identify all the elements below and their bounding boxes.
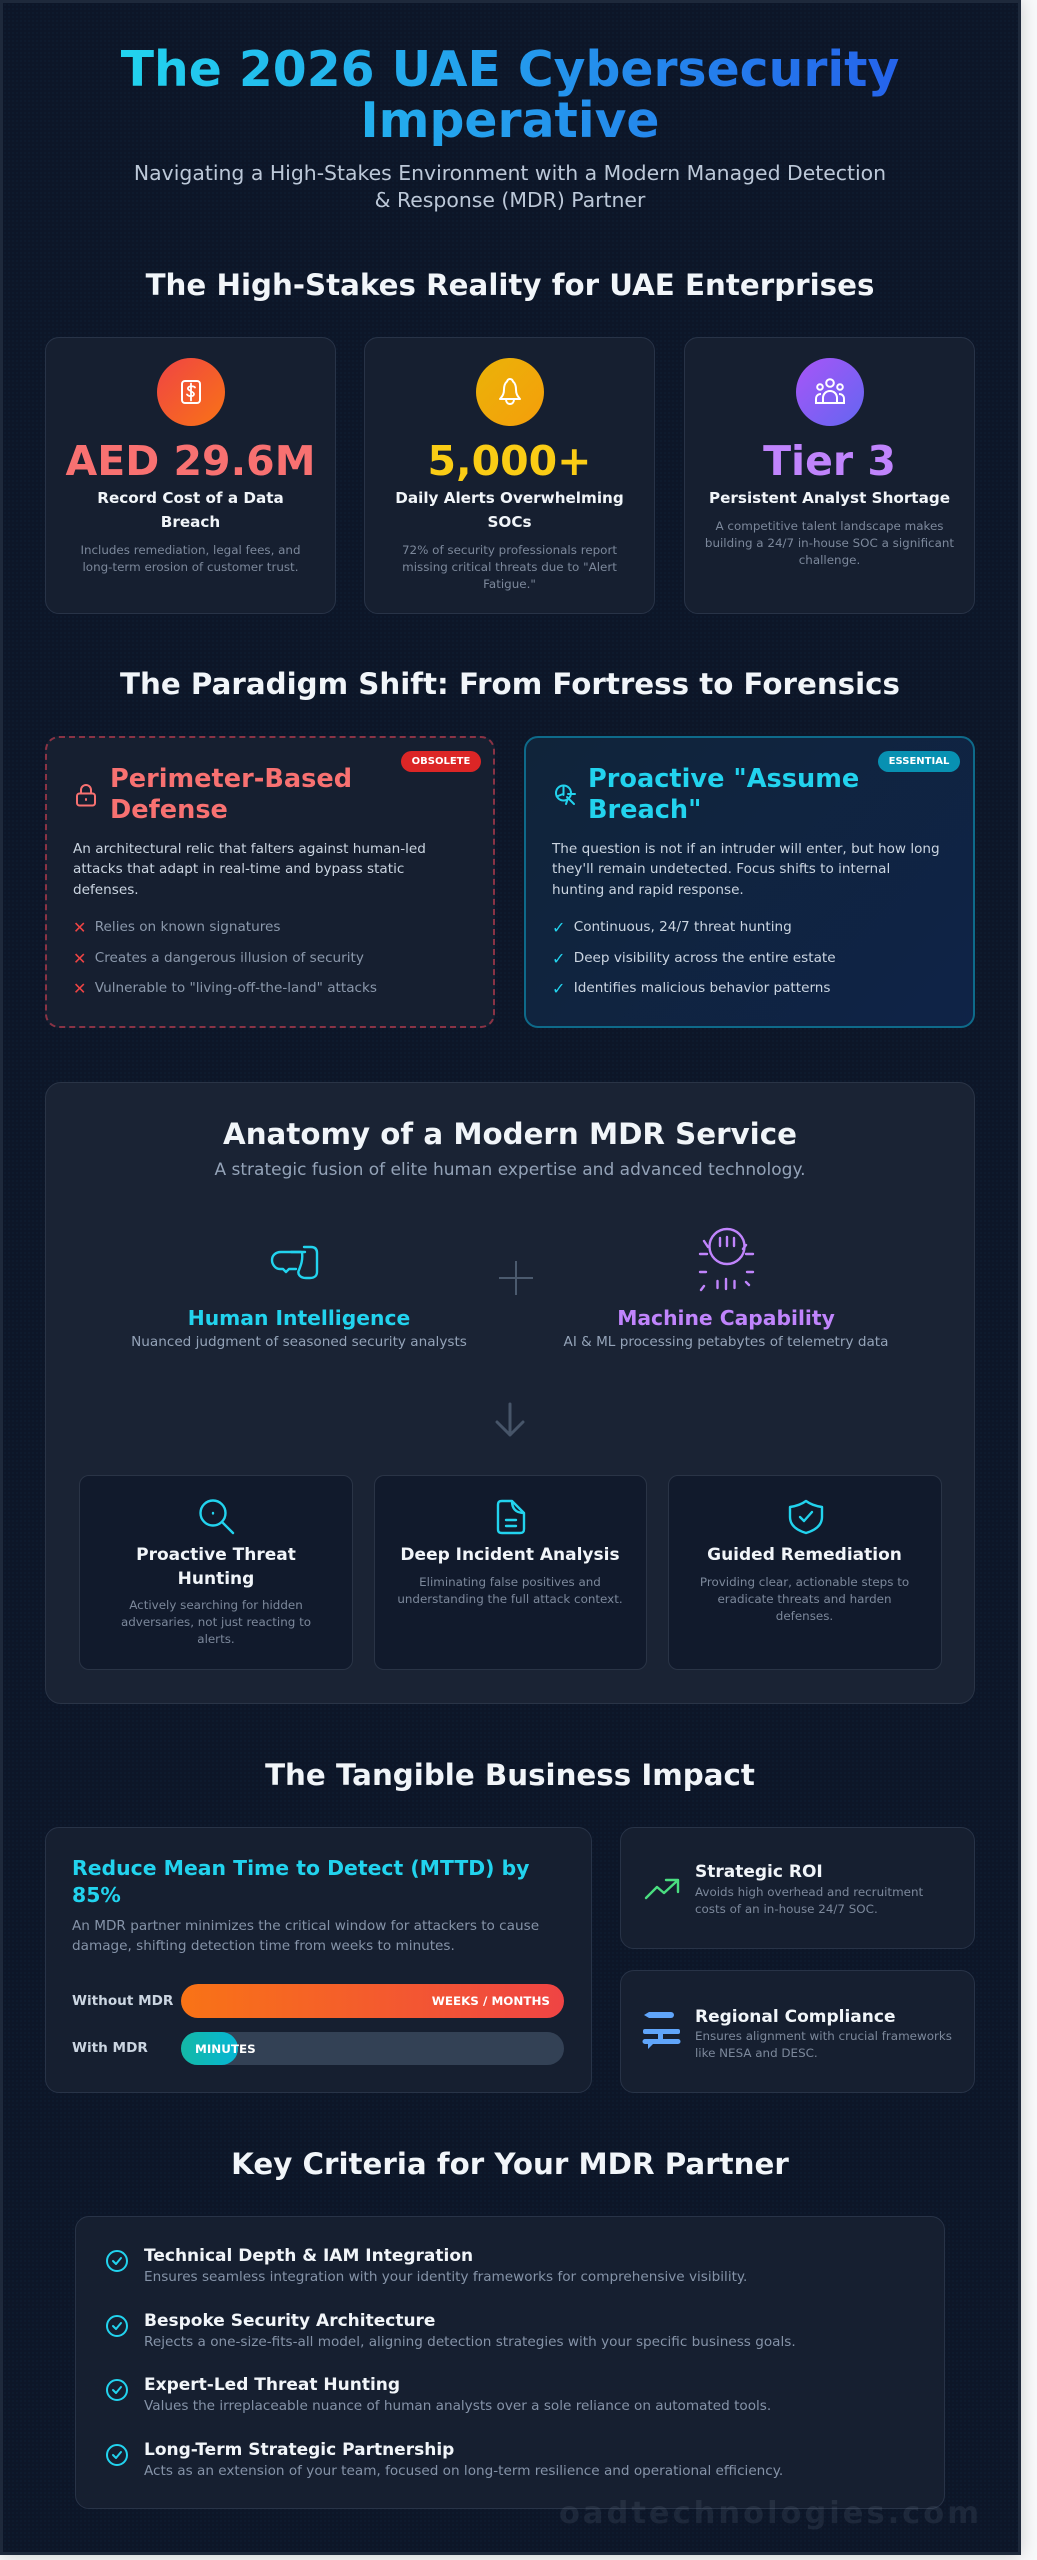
paragraph: The question is not if an intruder will enter, but how long <box>552 841 940 857</box>
description: Actively searching for hidden <box>129 1598 303 1612</box>
heading: Perimeter-Based <box>110 764 352 794</box>
sub-card: threat hunting <box>79 1475 353 1670</box>
description: 72% of security professionals report <box>402 543 617 557</box>
description: long-term erosion of customer trust. <box>82 560 299 574</box>
icon: trend up <box>645 1879 679 1900</box>
label <box>395 489 624 531</box>
label <box>97 489 284 531</box>
subtitle <box>134 161 886 212</box>
description <box>397 1575 623 1606</box>
panel: key criteria <box>75 2216 945 2509</box>
title: Strategic ROI <box>695 1862 823 1882</box>
label: Machine Capability <box>617 1306 835 1330</box>
heading: Proactive "Assume <box>588 764 859 794</box>
list <box>552 918 836 998</box>
title: Imperative <box>360 92 659 149</box>
human intelligence <box>131 1246 467 1350</box>
icon: check circle <box>106 2379 128 2401</box>
description: Includes remediation, legal fees, and <box>80 543 301 557</box>
panel: perimeter defense <box>45 736 495 1028</box>
title: Guided Remediation <box>707 1545 902 1565</box>
description <box>695 1884 923 1918</box>
list item: ✕ Creates a dangerous illusion of security <box>73 948 364 968</box>
description <box>80 543 301 574</box>
icon: check circle <box>106 2444 128 2466</box>
badge: essential: ESSENTIAL <box>889 756 949 767</box>
description: Nuanced judgment of seasoned security analysts <box>131 1334 467 1350</box>
list item: ✓ Deep visibility across the entire estate <box>552 948 836 968</box>
list item: ✕ Relies on known signatures <box>73 918 280 937</box>
watermark: oadtechnologies.com <box>559 2496 982 2531</box>
description: Ensures seamless integration with your identity frameworks for comprehensive visibility. <box>144 2269 747 2285</box>
panel: analyst shortage <box>684 337 975 614</box>
description: Fatigue." <box>483 577 536 591</box>
heading: Defense <box>110 795 228 825</box>
panel: daily alerts <box>364 337 655 614</box>
description <box>402 543 617 591</box>
stat: 5,000+ <box>427 437 592 485</box>
subtitle: & Response (MDR) Partner <box>375 188 645 212</box>
paragraph: damage, shifting detection time from weeks to minutes. <box>72 1938 455 1954</box>
title <box>136 1545 296 1589</box>
title: Bespoke Security Architecture <box>144 2310 435 2330</box>
description: Ensures alignment with crucial frameworks <box>695 2029 952 2043</box>
heading <box>588 764 859 825</box>
section heading: high-stakes reality: The High-Stakes Reality for UAE Enterprises <box>146 268 874 302</box>
description <box>700 1575 909 1623</box>
badge: obsolete <box>401 751 481 772</box>
description: eradicate threats and harden <box>717 1592 892 1606</box>
icon: signpost <box>643 2012 681 2050</box>
heading: Anatomy of a Modern MDR Service <box>223 1117 797 1151</box>
panel: anatomy of MDR <box>45 1082 975 1704</box>
section heading: paradigm shift: The Paradigm Shift: From Fortress to Forensics <box>120 667 900 701</box>
icon: check circle <box>106 2314 128 2336</box>
title: Hunting <box>178 1569 254 1589</box>
icon: speech bubbles <box>270 1246 318 1280</box>
description <box>121 1598 311 1646</box>
icon: search target <box>555 784 576 805</box>
panel: MTTD reduction <box>45 1827 592 2093</box>
title: Long-Term Strategic Partnership <box>144 2440 454 2460</box>
icon: shield check <box>788 1500 824 1534</box>
description: Eliminating false positives and <box>419 1575 601 1589</box>
icon: plus <box>499 1261 533 1295</box>
criterion 2 <box>106 2308 906 2358</box>
machine capability <box>564 1228 888 1350</box>
icon: dollar <box>157 358 225 426</box>
description: Values the irreplaceable nuance of human analysts over a sole reliance on automated tools. <box>144 2398 771 2414</box>
description: missing critical threats due to "Alert <box>402 560 617 574</box>
description <box>705 519 954 567</box>
description: adversaries, not just reacting to <box>121 1615 311 1629</box>
paragraph: An architectural relic that falters against human-led <box>73 841 426 857</box>
paragraph: defenses. <box>73 882 139 898</box>
description: Acts as an extension of your team, focused on long-term resilience and operational efficiency. <box>144 2462 783 2478</box>
list item: ✓ Continuous, 24/7 threat hunting <box>552 918 792 937</box>
panel: regional compliance <box>620 1970 975 2093</box>
description: like NESA and DESC. <box>695 2046 818 2060</box>
stat: AED 29.6M <box>65 437 316 485</box>
section heading: key criteria: Key Criteria for Your MDR Partner <box>231 2147 789 2181</box>
bar: without MDR <box>181 1984 564 2018</box>
description: Rejects a one-size-fits-all model, aligning detection strategies with your specific business goals. <box>144 2334 796 2350</box>
bar: with MDR <box>181 2032 564 2065</box>
label: SOCs <box>487 513 532 531</box>
title: Deep Incident Analysis <box>400 1545 620 1565</box>
criterion 1 <box>106 2244 906 2294</box>
paragraph: they'll remain undetected. Focus shifts to internal <box>552 861 890 877</box>
icon: people <box>796 358 864 426</box>
paragraph: An MDR partner minimizes the critical window for attackers to cause <box>72 1918 539 1934</box>
sub-card: remediation <box>668 1475 942 1670</box>
sub-card: incident analysis <box>374 1475 646 1670</box>
description: defenses. <box>776 1609 833 1623</box>
description: AI & ML processing petabytes of telemetry data <box>564 1334 888 1350</box>
bar chart: detection time <box>72 1984 567 2067</box>
description: building a 24/7 in-house SOC a significant <box>705 536 954 550</box>
description: Avoids high overhead and recruitment <box>695 1885 923 1899</box>
label: Daily Alerts Overwhelming <box>395 489 624 507</box>
description: challenge. <box>799 553 860 567</box>
paragraph <box>72 1918 539 1954</box>
paragraph <box>73 841 426 898</box>
description: A competitive talent landscape makes <box>716 519 943 533</box>
title <box>121 41 899 149</box>
bar: with MDR: MINUTES <box>195 2042 256 2056</box>
criterion 4 <box>106 2438 906 2488</box>
section heading: business impact: The Tangible Business Impact <box>265 1758 755 1792</box>
stat: Tier 3 <box>763 437 896 485</box>
label: Breach <box>161 513 220 531</box>
heading: 85% <box>72 1883 121 1907</box>
description: alerts. <box>197 1632 235 1646</box>
icon: magnifier <box>199 1499 234 1534</box>
description: understanding the full attack context. <box>397 1592 623 1606</box>
heading: Reduce Mean Time to Detect (MTTD) by <box>72 1856 529 1880</box>
heading <box>72 1856 529 1907</box>
icon: check circle <box>106 2250 128 2272</box>
label: Human Intelligence <box>188 1306 410 1330</box>
title: The 2026 UAE Cybersecurity <box>121 41 899 98</box>
list item: ✕ Vulnerable to "living-off-the-land" attacks <box>73 979 377 998</box>
criterion 3 <box>106 2373 906 2423</box>
badge: essential <box>878 751 960 772</box>
list <box>73 918 377 998</box>
panel: assume breach <box>524 736 975 1028</box>
paragraph: hunting and rapid response. <box>552 882 744 898</box>
label: with MDR: With MDR <box>72 2040 148 2056</box>
icon: bell <box>476 358 544 426</box>
arrow: down <box>496 1402 524 1436</box>
bar: without MDR: WEEKS / MONTHS <box>432 1994 550 2008</box>
list item: ✓ Identifies malicious behavior patterns <box>552 979 831 998</box>
description: costs of an in-house 24/7 SOC. <box>695 1902 878 1916</box>
header <box>121 41 899 212</box>
title: Expert-Led Threat Hunting <box>144 2375 400 2395</box>
label: Record Cost of a Data <box>97 489 284 507</box>
subtitle: Navigating a High-Stakes Environment with a Modern Managed Detection <box>134 161 886 185</box>
label: without MDR: Without MDR <box>72 1993 173 2009</box>
heading <box>110 764 352 825</box>
panel: strategic ROI <box>620 1827 975 1949</box>
heading: Breach" <box>588 795 702 825</box>
description <box>695 2028 952 2062</box>
paragraph <box>552 841 940 898</box>
icon: brain chip <box>698 1228 754 1292</box>
label: Persistent Analyst Shortage <box>709 489 950 507</box>
panel: record cost <box>45 337 336 614</box>
badge: obsolete: OBSOLETE <box>412 756 470 767</box>
description: Providing clear, actionable steps to <box>700 1575 909 1589</box>
subheading: A strategic fusion of elite human expertise and advanced technology. <box>214 1160 806 1180</box>
title: Regional Compliance <box>695 2007 896 2027</box>
paragraph: attacks that adapt in real-time and bypass static <box>73 861 404 877</box>
icon: lock <box>76 784 96 806</box>
title: Technical Depth & IAM Integration <box>144 2246 473 2266</box>
title: Proactive Threat <box>136 1545 296 1565</box>
icon: document <box>496 1500 526 1534</box>
